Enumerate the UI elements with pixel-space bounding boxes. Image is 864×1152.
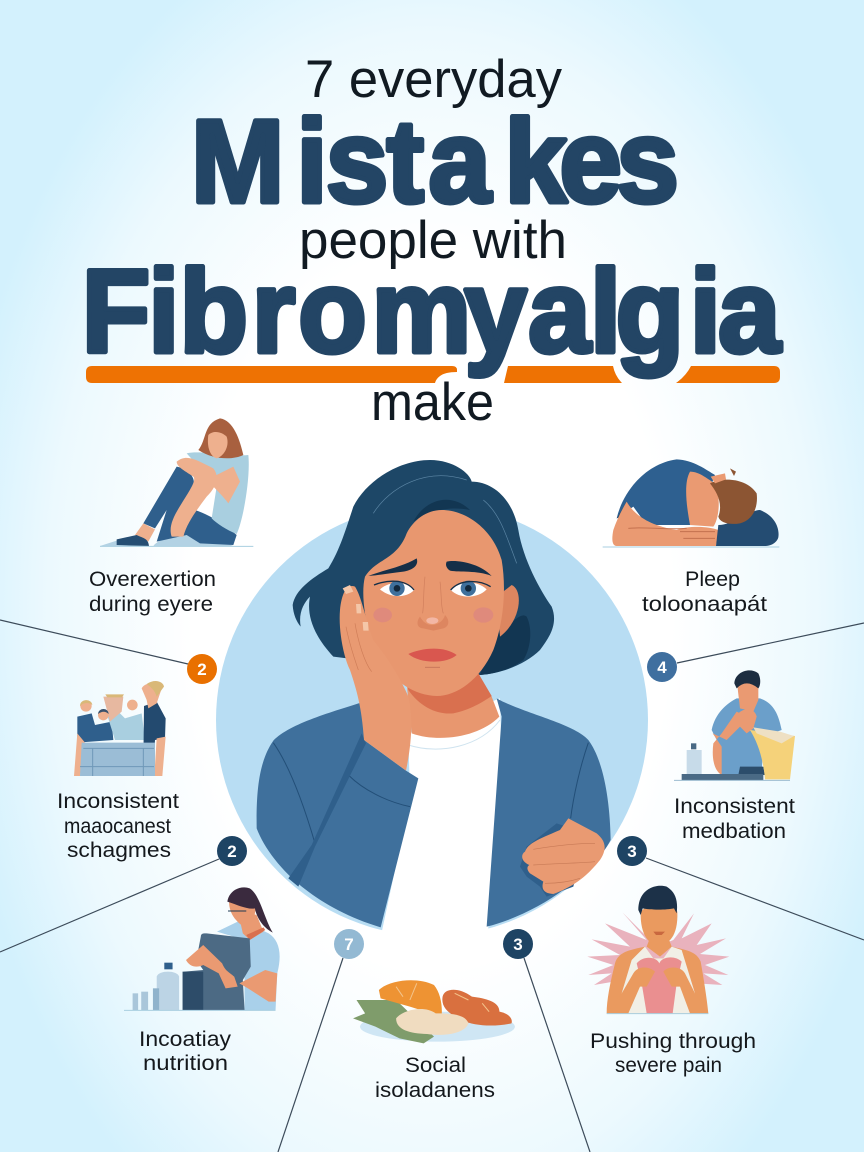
title line: make: make — [371, 373, 494, 432]
panel: Pushing through severe pain — [587, 886, 756, 1077]
panel: Social — [353, 980, 515, 1102]
face — [363, 510, 504, 696]
icon: group of people at a table — [74, 681, 166, 776]
badge: navy 3 bottom — [503, 929, 533, 959]
icon: woman with appliance and bottles — [124, 887, 280, 1010]
panel: nutrition — [124, 887, 280, 1075]
right ear — [497, 585, 519, 637]
central illustration: woman holding her face — [257, 460, 611, 940]
label line 2: maaocanest — [64, 815, 171, 838]
title line: Fibromyalgia: Fibromyalgia — [82, 246, 782, 378]
badge: navy 3 right — [617, 836, 647, 866]
panel: Overexertion — [89, 418, 253, 616]
mouth — [408, 649, 457, 662]
orange underline — [86, 366, 780, 383]
icon: food plate with meat and greens — [353, 980, 515, 1043]
icon: man with hands clasped, jar and bottle — [674, 670, 795, 780]
title line: people with: people with — [299, 211, 567, 270]
badge: navy 3 right: 3 — [627, 842, 637, 861]
panel: Inconsistent schedules — [57, 681, 179, 862]
label line 2: isoladanens — [375, 1079, 495, 1102]
label line 2: severe pain — [615, 1054, 722, 1077]
label line 3: schagmes — [67, 839, 171, 862]
label: Inconsistent — [57, 790, 179, 813]
back hair — [293, 460, 554, 675]
blush — [373, 608, 392, 622]
badge: navy 2: 2 — [227, 842, 237, 861]
title — [82, 50, 782, 432]
icon: woman sitting hugging knee — [100, 418, 253, 546]
label line 2: toloonaapát — [642, 593, 767, 616]
panel: Sleep — [603, 459, 779, 616]
white shirt — [380, 698, 503, 940]
badge: orange 2 — [187, 654, 217, 684]
shirt collar — [408, 720, 500, 749]
panel: Inconsistent medication — [674, 670, 795, 843]
neck — [407, 673, 499, 738]
left hand — [340, 586, 411, 771]
badge: light blue 7: 7 — [344, 935, 354, 954]
connector lines — [0, 620, 864, 1152]
label line 2: medbation — [682, 820, 786, 843]
icon: man with pain rays — [587, 886, 729, 1014]
label: Inconsistent — [674, 795, 795, 818]
label line 2: nutrition — [143, 1052, 228, 1075]
badge: navy 3 bottom: 3 — [513, 935, 523, 954]
badge: light blue 7 — [334, 929, 364, 959]
right hand — [520, 823, 587, 897]
label: Overexertion — [89, 568, 216, 591]
label: Pleep — [685, 568, 740, 591]
jacket — [257, 698, 611, 927]
label: Pushing through — [590, 1030, 756, 1053]
badge: blue 4 — [647, 652, 677, 682]
central circle backdrop — [216, 504, 648, 936]
title line: Mistakes: Mistakes — [191, 96, 679, 228]
nose — [418, 615, 448, 631]
title line: 7 everyday: 7 everyday — [305, 50, 562, 109]
badge: blue 4: 4 — [657, 658, 667, 677]
badge: navy 2 — [217, 836, 247, 866]
icon: person resting head on arms — [603, 459, 779, 547]
eyebrows — [368, 558, 492, 576]
badge: orange 2: 2 — [197, 660, 207, 679]
label: Incoatiay — [139, 1028, 232, 1051]
label: Social — [405, 1054, 466, 1077]
label line 2: during eyere — [89, 593, 213, 616]
eyes — [380, 583, 487, 597]
